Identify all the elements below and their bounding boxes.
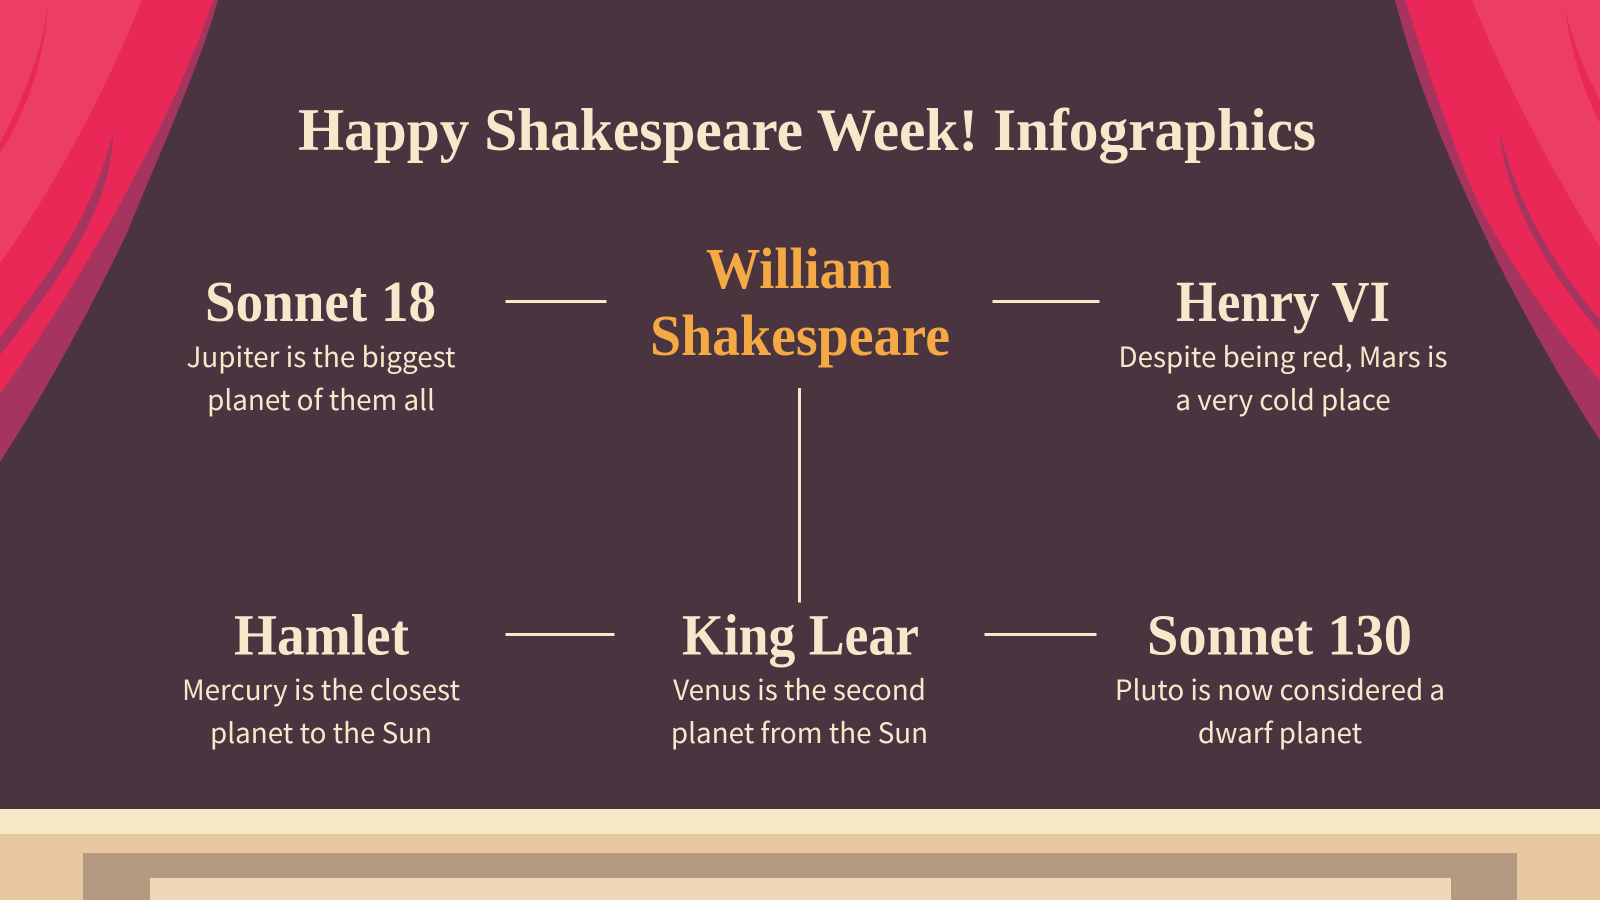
panel: Sonnet 130: dwarf planet — [1198, 712, 1363, 752]
panel: Sonnet 18: planet of them all — [207, 379, 435, 419]
panel: King Lear: King Lear — [682, 602, 919, 668]
panel: King Lear: planet from the Sun — [671, 712, 928, 752]
panel: Sonnet 18: Sonnet 18 — [205, 269, 436, 334]
panel: King Lear: Venus is the second — [673, 669, 926, 709]
left curtain — [0, 0, 218, 462]
panel: Sonnet 130: Pluto is now considered a — [1115, 669, 1445, 709]
panel: Henry VI: Henry VI — [1176, 269, 1390, 334]
panel: Henry VI — [1118, 269, 1448, 419]
title: Happy Shakespeare Week! Infographics — [298, 97, 1316, 163]
panel: Hamlet: planet to the Sun — [210, 712, 432, 752]
panel: Sonnet 130: Sonnet 130 — [1147, 602, 1412, 668]
connector: William Shakespeare to King Lear — [798, 388, 801, 602]
connector: William Shakespeare to Henry VI — [992, 300, 1100, 303]
panel: Henry VI: a very cold place — [1175, 379, 1391, 419]
center topic: William Shakespeare — [650, 236, 950, 368]
right curtain — [1395, 0, 1600, 440]
connector: King Lear to Sonnet 130 — [984, 633, 1096, 636]
panel: Hamlet: Hamlet — [234, 602, 410, 668]
panel: Sonnet 18 — [186, 269, 456, 419]
connector: Sonnet 18 to William Shakespeare — [506, 300, 606, 303]
panel: Henry VI: Despite being red, Mars is — [1118, 336, 1448, 376]
connector: Hamlet to King Lear — [506, 633, 614, 636]
panel: Sonnet 130 — [1115, 602, 1445, 752]
stage floor — [0, 809, 1600, 900]
center topic: William Shakespeare: William — [706, 236, 892, 301]
center topic: William Shakespeare: Shakespeare — [650, 303, 950, 368]
panel: King Lear — [671, 602, 928, 752]
panel: Hamlet: Mercury is the closest — [182, 669, 460, 709]
panel: Sonnet 18: Jupiter is the biggest — [186, 336, 456, 376]
panel: Hamlet — [182, 602, 460, 752]
